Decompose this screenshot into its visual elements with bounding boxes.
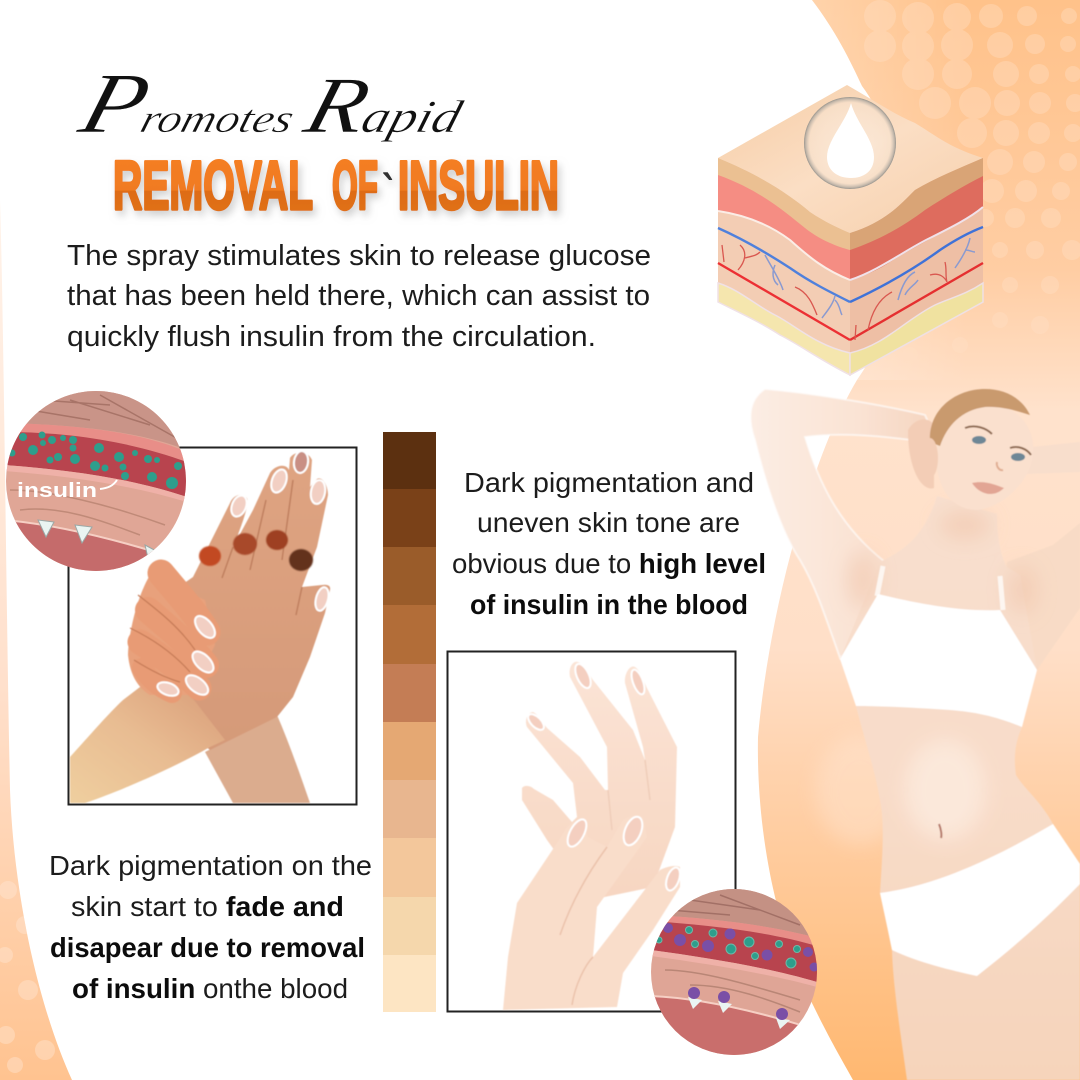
text: insulin removal fading: of insulin onthe blood — [72, 973, 348, 1004]
head — [922, 389, 1033, 510]
front hand with fingers — [503, 816, 680, 1010]
lips — [972, 482, 1004, 494]
background: peach shape left — [0, 200, 72, 1080]
title: orange heading: ` — [382, 164, 394, 220]
cube top surface — [718, 85, 983, 233]
inset circle: insulin in blood — [5, 390, 187, 575]
back forearm — [205, 715, 310, 803]
finger separators — [222, 480, 302, 615]
navel — [939, 824, 941, 838]
torso highlight — [905, 740, 985, 840]
dark pigment patches — [199, 530, 313, 571]
text: high insulin pigmentation: Dark pigmentation and — [464, 467, 754, 498]
gripping fingers — [140, 573, 207, 693]
tissue lines — [10, 490, 165, 535]
rear finger separators — [608, 760, 650, 830]
title: orange heading: INSULIN — [398, 147, 559, 224]
colour scale bar — [383, 432, 436, 1012]
lower layer — [654, 995, 799, 1055]
text: high insulin pigmentation: obvious due to high level — [452, 548, 766, 579]
grip finger separators — [130, 595, 195, 682]
far forearm — [1025, 442, 1080, 474]
underwear — [880, 824, 1080, 976]
glucose particles — [663, 923, 818, 972]
label: insulin: insulin — [17, 480, 97, 502]
nose — [997, 462, 1003, 470]
front forearm — [70, 687, 225, 803]
arm lower right — [1000, 523, 1080, 670]
torso and legs — [840, 496, 1080, 1080]
photo: woman — [751, 389, 1080, 1080]
bra straps — [877, 566, 1003, 610]
back hand with fingers — [150, 453, 330, 750]
cube right face — [850, 158, 983, 375]
muscle fibres — [672, 889, 808, 936]
illustration: skin cube with droplet — [718, 85, 983, 375]
inset circle: insulin removed — [651, 889, 818, 1056]
nails — [525, 662, 683, 892]
background: peach shape right — [758, 0, 1080, 1080]
rear hand with fingers — [522, 662, 677, 900]
intro text: quickly flush insulin from the circulation. — [67, 321, 596, 353]
nails — [156, 450, 331, 699]
tissue lines — [665, 970, 800, 1012]
droplet bubble — [804, 97, 896, 189]
gripping hand — [128, 575, 215, 695]
pink band — [668, 916, 812, 944]
blood vessel — [651, 921, 817, 982]
lower layer — [15, 520, 152, 571]
cube left face — [718, 158, 850, 375]
armpit and neck shading — [848, 511, 1036, 614]
ear — [922, 438, 938, 478]
intro text: The spray stimulates skin to release glucose — [67, 240, 651, 272]
title: orange heading: OF — [332, 147, 378, 224]
insulin particles — [8, 432, 182, 489]
receptors — [688, 987, 790, 1029]
muscle fibres — [26, 391, 180, 447]
text: high insulin pigmentation — [452, 467, 766, 620]
intro text: that has been held there, which can assist to — [67, 280, 650, 312]
photo frame: dark pigmented hands — [68, 448, 356, 804]
raised left arm — [751, 389, 929, 658]
bra — [840, 594, 1037, 727]
title: orange heading: REMOVAL — [113, 147, 313, 224]
hand behind head — [908, 419, 934, 488]
title: script line: Promotes Rapid — [69, 56, 479, 151]
blood vessel — [5, 432, 187, 497]
text: insulin removal fading — [49, 850, 372, 1004]
hair — [930, 389, 1030, 446]
label: insulin — [17, 480, 117, 502]
pink band — [20, 424, 184, 461]
text: insulin removal fading: skin start to fade and — [71, 891, 344, 922]
text: insulin removal fading: disapear due to removal — [50, 932, 365, 963]
eyes and brows — [965, 426, 1031, 455]
photo frame: clear hands — [448, 652, 736, 1012]
intro text — [67, 240, 651, 353]
text: high insulin pigmentation: of insulin in the blood — [470, 589, 748, 620]
text: insulin removal fading: Dark pigmentation on the — [49, 850, 372, 881]
text: high insulin pigmentation: uneven skin tone are — [477, 507, 740, 538]
front finger shading — [560, 847, 607, 1005]
receptors — [38, 520, 158, 558]
insulin particles — [656, 926, 800, 968]
